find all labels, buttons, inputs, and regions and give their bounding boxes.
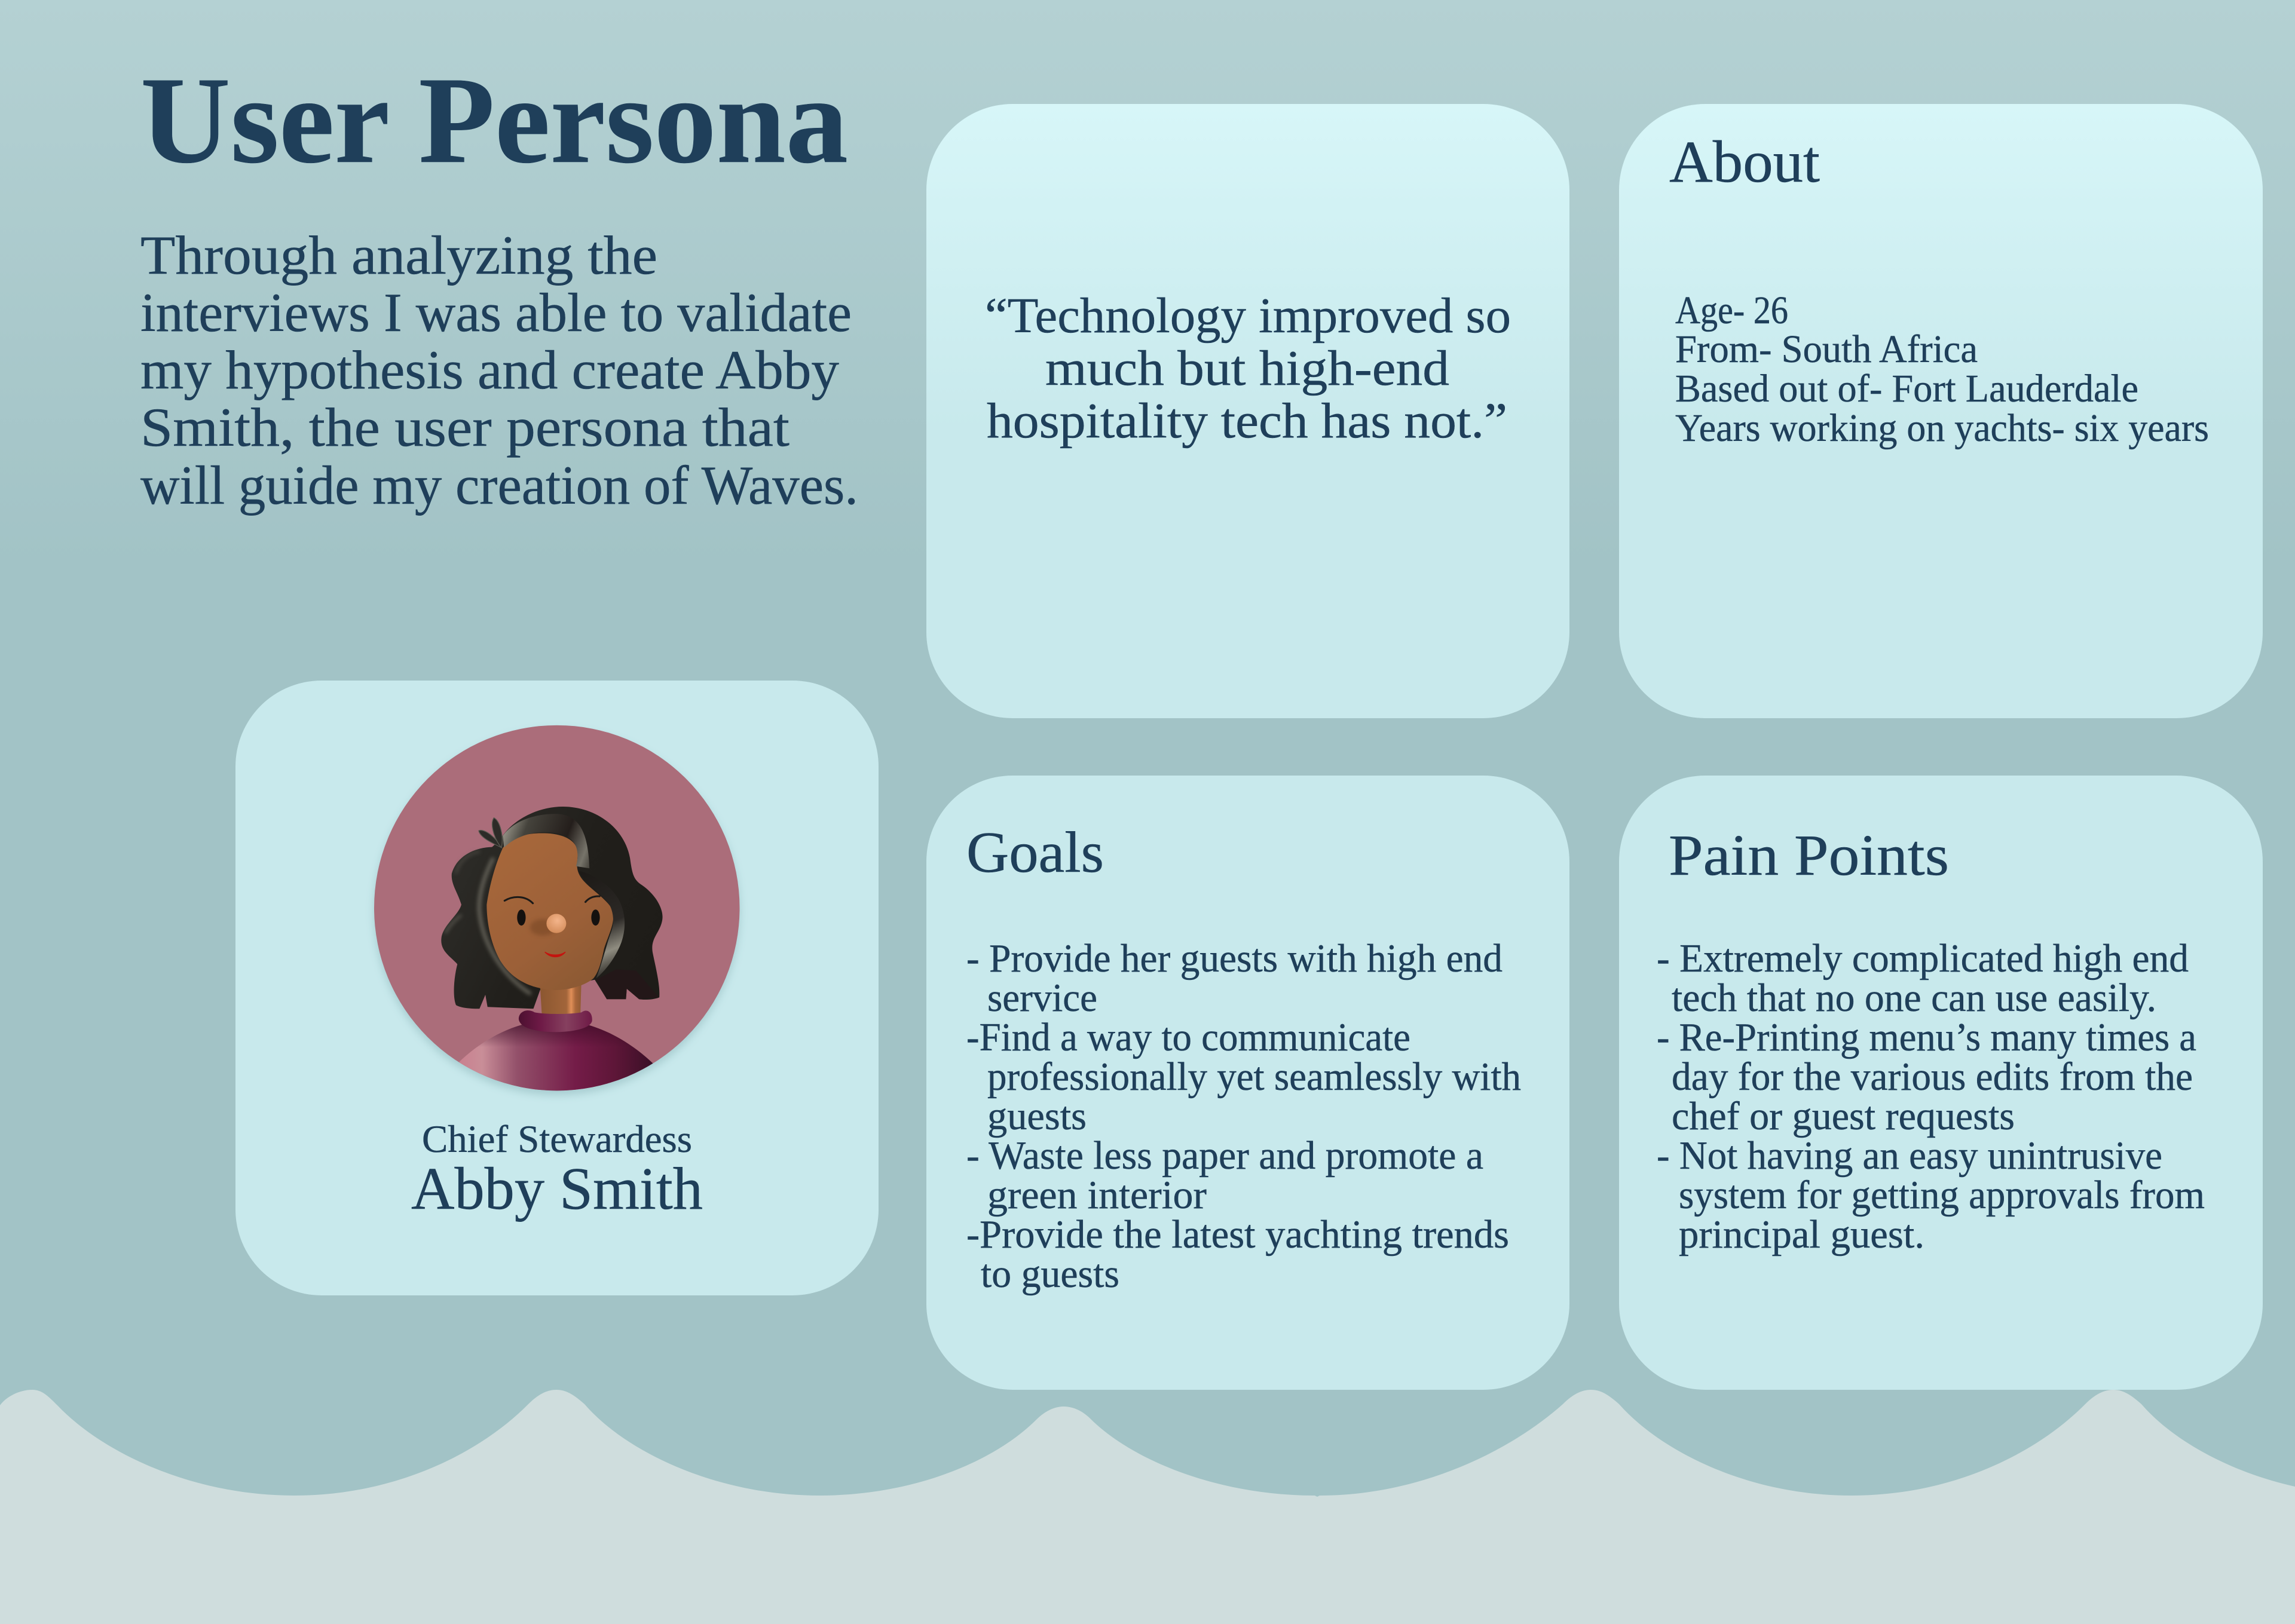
quote text xyxy=(985,288,1511,449)
pain points list: - Re-Printing menu’s many times a xyxy=(1657,1015,2196,1059)
pain points list: system for getting approvals from xyxy=(1679,1173,2205,1217)
pain points list: - Not having an easy unintrusive xyxy=(1657,1133,2162,1178)
goals heading: Goals xyxy=(966,820,1104,885)
pain points list: tech that no one can use easily. xyxy=(1672,976,2156,1020)
mouth xyxy=(545,952,565,957)
quote text: much but high-end xyxy=(1045,341,1449,396)
panel: about xyxy=(1619,104,2263,718)
hair shine left xyxy=(479,858,531,994)
intro paragraph: Through analyzing the xyxy=(140,225,657,286)
about details xyxy=(1675,289,2209,450)
hair tips shadow xyxy=(596,969,659,999)
goals list: service xyxy=(987,976,1097,1020)
job title: Chief Stewardess xyxy=(422,1118,692,1161)
body xyxy=(459,1025,653,1091)
face xyxy=(486,834,614,990)
hair back xyxy=(441,807,663,1009)
intro paragraph xyxy=(140,225,858,516)
nose xyxy=(546,914,566,933)
goals list: green interior xyxy=(987,1173,1207,1217)
quote text: “Technology improved so xyxy=(985,288,1511,344)
pain points list xyxy=(1657,936,2205,1257)
goals list xyxy=(966,936,1521,1296)
pain points heading: Pain Points xyxy=(1669,823,1949,888)
goals list: -Find a way to communicate xyxy=(966,1015,1410,1059)
title: User Persona xyxy=(140,51,848,189)
about details: From- South Africa xyxy=(1675,327,1978,371)
hair front band xyxy=(503,814,589,868)
avatar portrait xyxy=(374,725,740,1099)
quote text: hospitality tech has not.” xyxy=(987,393,1507,449)
goals list: professionally yet seamlessly with xyxy=(987,1055,1521,1099)
panel: goals xyxy=(926,776,1569,1390)
collar xyxy=(519,1010,592,1032)
pain points list: principal guest. xyxy=(1679,1212,1924,1257)
panel: profile xyxy=(235,681,879,1295)
about details: Age- 26 xyxy=(1675,289,1788,332)
panel: pain points xyxy=(1619,776,2263,1390)
nose shadow xyxy=(530,919,556,936)
persona name: Abby Smith xyxy=(411,1155,703,1222)
goals list: -Provide the latest yachting trends xyxy=(966,1212,1509,1257)
wave footer band xyxy=(0,1390,2295,1624)
intro paragraph: Smith, the user persona that xyxy=(140,397,790,458)
intro paragraph: will guide my creation of Waves. xyxy=(140,455,858,516)
goals list: - Waste less paper and promote a xyxy=(966,1133,1483,1178)
pain points list: - Extremely complicated high end xyxy=(1657,936,2189,980)
eyes xyxy=(517,909,600,926)
panel: quote xyxy=(926,104,1569,718)
intro paragraph: my hypothesis and create Abby xyxy=(140,339,839,400)
goals list: to guests xyxy=(981,1252,1119,1296)
intro paragraph: interviews I was able to validate xyxy=(140,282,852,343)
neck xyxy=(540,980,582,1016)
about details: Years working on yachts- six years xyxy=(1675,406,2209,450)
hair bow xyxy=(479,818,502,848)
pain points list: chef or guest requests xyxy=(1672,1094,2015,1138)
eyebrows xyxy=(504,896,599,903)
pain points list: day for the various edits from the xyxy=(1672,1055,2193,1099)
about details: Based out of- Fort Lauderdale xyxy=(1675,367,2138,410)
goals list: guests xyxy=(987,1094,1087,1138)
about heading: About xyxy=(1669,128,1820,195)
goals list: - Provide her guests with high end xyxy=(966,936,1503,980)
